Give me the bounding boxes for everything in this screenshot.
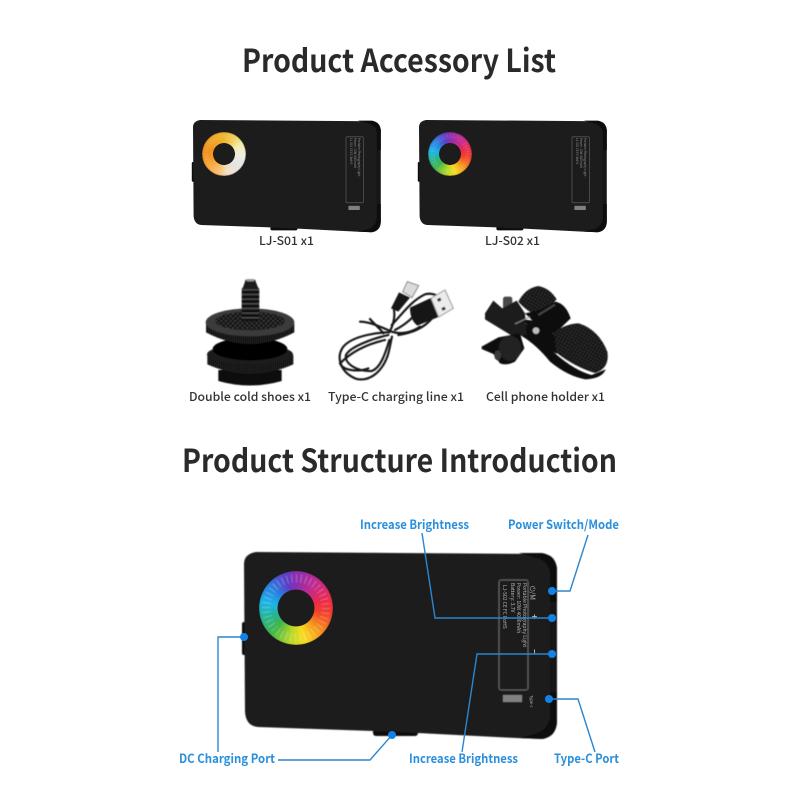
icon: cell phone holder clip xyxy=(482,286,608,379)
spec label text: LJ-S02 CE FC RoHS xyxy=(501,585,508,629)
callout: increase brightness bottom: Increase Brightness xyxy=(409,748,518,767)
callout: increase brightness top xyxy=(360,514,556,622)
icon: warm colour temperature ring xyxy=(202,132,246,176)
spec label text: Portable Photography Light xyxy=(357,138,361,177)
spec label text xyxy=(349,138,361,177)
spec label text: Power: 10W 4000mAh xyxy=(515,583,522,633)
callout: increase brightness bottom xyxy=(409,650,556,767)
icon: large RGB colour ring xyxy=(259,571,333,645)
callout: power switch/mode: Power Switch/Mode xyxy=(508,514,619,533)
icon: double cold shoe xyxy=(206,279,294,385)
title: Product Structure Introduction: Product Structure Introduction xyxy=(182,436,617,482)
panel: LJ-S01 light xyxy=(192,120,381,232)
icon: RGB colour ring xyxy=(428,132,472,176)
spec label text: Portable Photography Light xyxy=(521,583,528,647)
callout: Type-C port xyxy=(545,695,620,767)
spec label text: − xyxy=(528,649,541,654)
spec label text: Power: 10W 4000mAh xyxy=(353,138,357,168)
spec label text: + xyxy=(528,614,541,619)
title: Product Accessory List: Product Accessory List xyxy=(242,36,556,82)
label: Type-C charging line: Type-C charging line x1 xyxy=(328,388,464,405)
label: LJ-S02: LJ-S02 x1 xyxy=(485,232,540,249)
callout: DC charging port: DC Charging Port xyxy=(179,748,276,767)
spec label text: ⏻/M xyxy=(527,586,537,600)
panel: LJ-S02 light xyxy=(418,120,607,232)
spec label text: Portable Photography Light xyxy=(583,138,587,177)
spec label text: LJ-S01 CE FC RoHS xyxy=(349,138,353,164)
callout: increase brightness top: Increase Brightness xyxy=(360,514,469,533)
spec label text xyxy=(501,583,541,708)
panel: main light structure diagram xyxy=(242,552,557,739)
callout: Type-C port: Type-C Port xyxy=(554,748,620,767)
spec label text xyxy=(575,138,587,177)
icon: Type-C charging cable xyxy=(340,282,453,379)
callout: DC charging port xyxy=(179,633,396,767)
label: double cold shoes: Double cold shoes x1 xyxy=(189,388,311,405)
spec label text: LJ-S02 CE FC RoHS xyxy=(575,138,579,164)
spec label text: Power: 10W 4000mAh xyxy=(579,138,583,168)
spec label text: Type-c xyxy=(528,695,534,708)
label: LJ-S01: LJ-S01 x1 xyxy=(259,232,314,249)
callout: power switch/mode xyxy=(508,514,619,595)
label: cell phone holder: Cell phone holder x1 xyxy=(486,388,605,405)
spec label text: Battery: 3.7V xyxy=(509,583,516,613)
